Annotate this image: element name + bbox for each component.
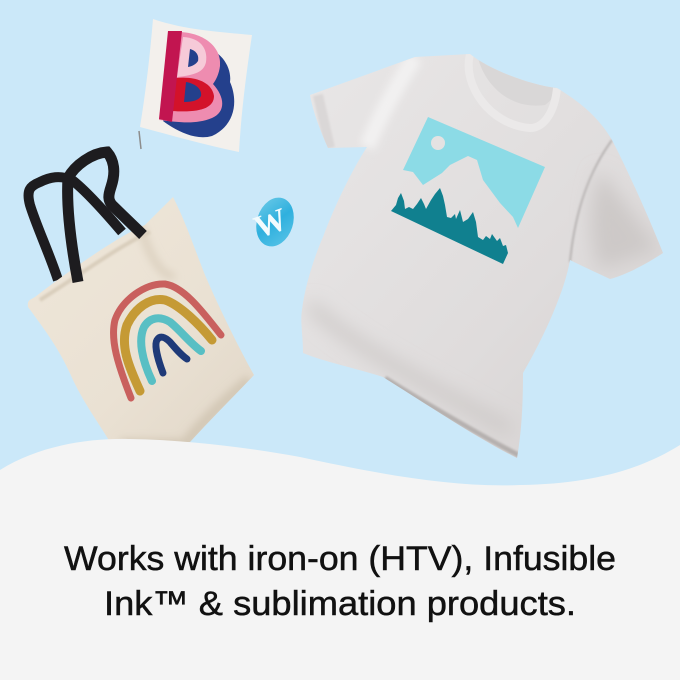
letter B crimson stem	[159, 31, 182, 122]
letter B navy shadow	[163, 45, 234, 137]
pouch zipper pull	[139, 131, 141, 149]
tote rear strap	[28, 177, 122, 280]
shirt inner neck	[478, 58, 557, 106]
letter B red lower	[172, 78, 214, 111]
left sleeve hem	[318, 95, 330, 148]
caption line 2: Ink™ & sublimation products.	[104, 585, 576, 623]
rainbow gold band	[124, 300, 212, 391]
product: white t-shirt with mountain design	[295, 50, 670, 465]
button W letter: W	[249, 200, 291, 245]
rainbow design	[113, 284, 221, 398]
rainbow teal band	[141, 318, 201, 381]
shirt graphic tree line	[391, 188, 508, 264]
rainbow red band	[113, 284, 221, 398]
letter B upper counter	[188, 49, 198, 67]
tote front strap	[68, 152, 143, 282]
shirt graphic sky and mountain	[403, 117, 545, 228]
letter B lower counter	[184, 82, 201, 102]
shirt graphic moon	[431, 136, 445, 150]
letter B pink	[159, 32, 222, 122]
rainbow navy band	[156, 337, 187, 373]
product: zip pouch with letter B	[139, 19, 252, 152]
shirt collar	[469, 54, 557, 128]
product: tote bag with rainbow	[20, 152, 260, 445]
shirt folds	[385, 378, 520, 456]
letter B light pink upper	[177, 37, 206, 77]
tote body	[20, 190, 260, 445]
bottom wave panel	[0, 439, 680, 680]
button disc	[250, 193, 300, 251]
pouch body	[140, 19, 252, 152]
shirt body	[295, 50, 670, 465]
caption	[64, 540, 616, 623]
product: W button	[249, 193, 300, 251]
right sleeve seam	[570, 140, 612, 262]
caption line 1: Works with iron-on (HTV), Infusible	[64, 540, 616, 578]
